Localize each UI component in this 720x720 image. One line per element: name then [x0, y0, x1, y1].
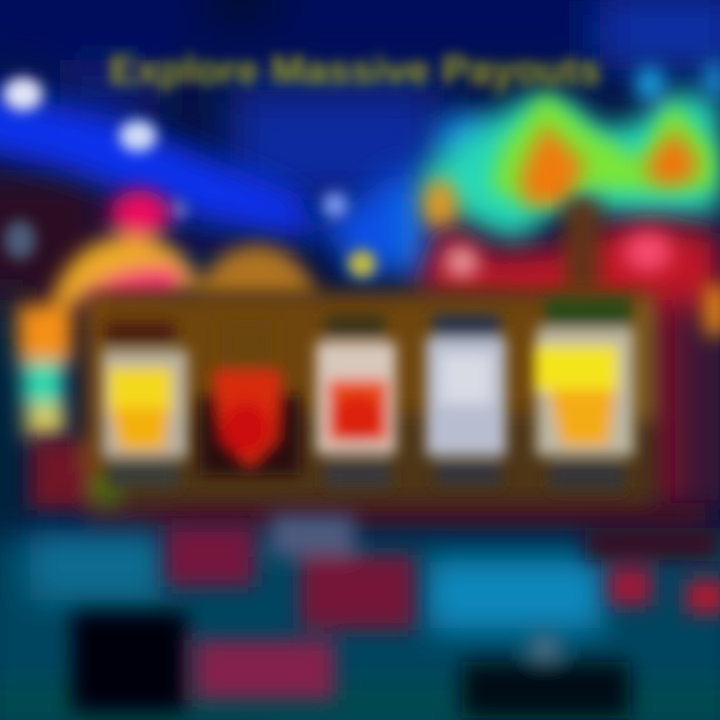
left lights and domes: [18, 190, 720, 438]
reel 2: [200, 320, 300, 475]
reel 5: [534, 298, 634, 490]
night sky: [0, 0, 720, 540]
reel 3: [316, 314, 396, 488]
red roof area: [415, 222, 720, 510]
stars: [3, 77, 376, 278]
reel 1: [102, 322, 188, 488]
blue diagonal band: [0, 85, 497, 285]
rainbow mountains: [420, 60, 720, 245]
reel 4: [426, 314, 506, 486]
slot machine frame: [30, 292, 705, 531]
floor and chips: [0, 515, 720, 720]
title: Explore Massive Payouts: [109, 47, 601, 93]
